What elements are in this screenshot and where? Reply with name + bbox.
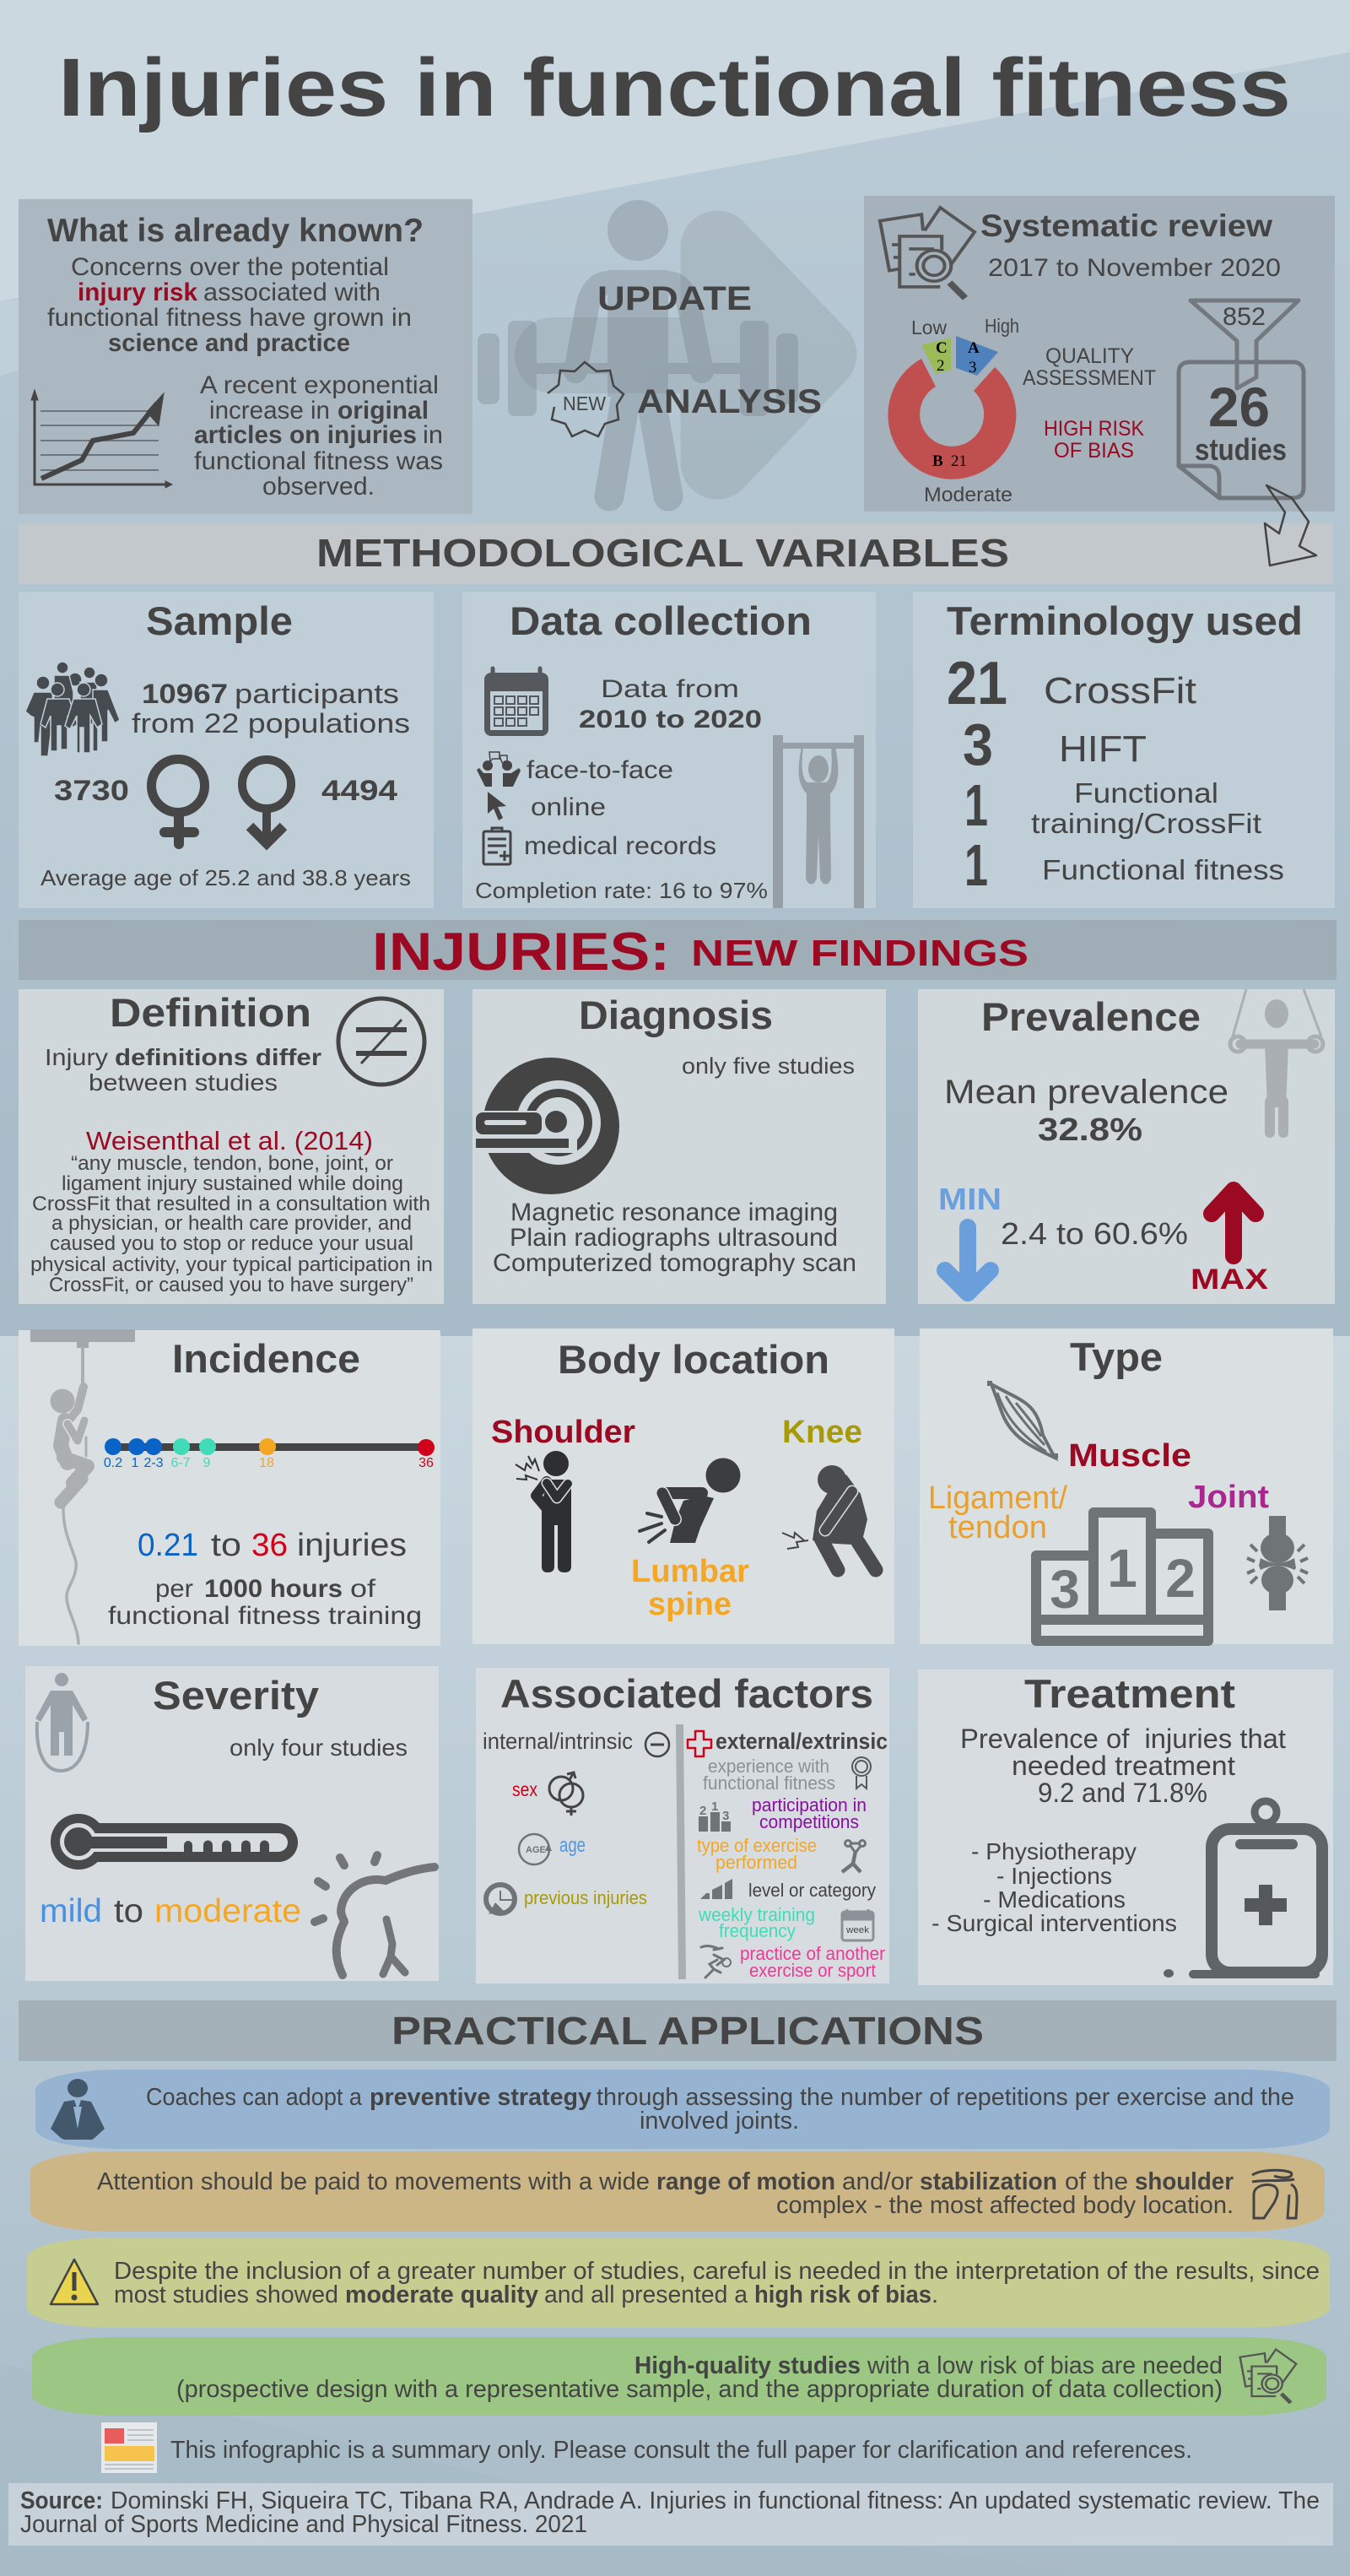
- donut chart: quality assessment: B: [932, 452, 943, 470]
- count: hift: HIFT: [1059, 728, 1147, 770]
- text: range of motion: and/or: [842, 2168, 913, 2195]
- severity range: [40, 1893, 301, 1929]
- factor: type of exercise: [697, 1835, 866, 1873]
- unit statement: 1000 hours: [204, 1575, 343, 1603]
- panel: data collection: [462, 592, 876, 908]
- icon: podium: [1036, 1513, 1208, 1641]
- icon: calendar: [484, 668, 548, 736]
- factor: another sport: [701, 1943, 885, 1981]
- icon: medical record: [483, 828, 510, 864]
- external heading: external/extrinsic: [716, 1729, 888, 1754]
- text: caution: moderate quality: [345, 2281, 538, 2308]
- heading: type: Type: [1070, 1334, 1163, 1379]
- quality assessment label: [1023, 344, 1156, 390]
- text: range of motion: range of motion: [656, 2168, 835, 2195]
- min label: MIN: [938, 1182, 1002, 1216]
- count: functional training: 1: [964, 772, 988, 838]
- chart: incidence timeline: 2-3: [143, 1456, 164, 1470]
- factor: level or category: level or category: [748, 1880, 876, 1901]
- count: crossfit: CrossFit: [1044, 670, 1196, 712]
- count: functional fitness: 1: [964, 832, 988, 898]
- text block: exponential increase: articles on injuries: [194, 421, 417, 449]
- label: online: online: [531, 793, 606, 821]
- title: Injuries in functional fitness: [58, 41, 1291, 133]
- icon: pull up bar and person: [773, 735, 864, 908]
- participants: [132, 679, 410, 739]
- chart: incidence timeline: 36: [418, 1456, 434, 1470]
- factor: weekly training frequency: [698, 1904, 873, 1941]
- modalities: Magnetic resonance imaging: [510, 1199, 838, 1226]
- factor: another sport: practice of another: [740, 1943, 885, 1964]
- panel: terminology used: [913, 592, 1335, 908]
- icon: minus: [645, 1733, 669, 1756]
- heading: incidence: Incidence: [172, 1336, 360, 1381]
- text: preventive strategy: through assessing the number of repetitions per exercise and the: [597, 2084, 1294, 2111]
- section band: injuries new findings: NEW FINDINGS: [691, 933, 1029, 974]
- unit statement: per: [155, 1575, 193, 1603]
- heading: diagnosis: Diagnosis: [579, 993, 773, 1037]
- factor: competitions: 3: [722, 1809, 729, 1823]
- factor: type of exercise: performed: [716, 1852, 797, 1873]
- text: caution: high risk of bias: [754, 2281, 932, 2308]
- text: high quality studies: with a low risk of bias are needed: [867, 2352, 1223, 2379]
- funnel and studies document: [1179, 300, 1304, 498]
- quote: a physician, or health care provider, and: [51, 1212, 412, 1235]
- chart: incidence timeline: 6-7: [170, 1456, 191, 1470]
- text: high quality studies: High-quality studies: [634, 2352, 861, 2379]
- panel: diagnosis: [472, 989, 886, 1304]
- source panel: Journal of Sports Medicine and Physical Fitness. 2021: [20, 2511, 587, 2538]
- text: range of motion: of the: [1065, 2168, 1128, 2195]
- average age: Average age of 25.2 and 38.8 years: [40, 865, 411, 890]
- participants: from 22 populations: [132, 708, 410, 739]
- panel: body location: [472, 1329, 894, 1644]
- text: range of motion: [97, 2168, 1234, 2219]
- funnel and studies document: 852: [1223, 303, 1266, 331]
- label: lumbar spine: Lumbar: [631, 1554, 749, 1589]
- text block: exponential increase: original: [338, 397, 429, 425]
- note: only four studies: [230, 1734, 408, 1761]
- source panel: Source:: [20, 2487, 103, 2514]
- text block: exponential increase: increase in: [209, 397, 330, 425]
- panel: type: [920, 1329, 1333, 1644]
- source panel: [8, 2483, 1333, 2546]
- quote: caused you to stop or reduce your usual: [50, 1232, 413, 1255]
- heading: associated factors: Associated factors: [500, 1671, 873, 1716]
- text: high quality studies: [176, 2352, 1223, 2403]
- text block: exponential increase: [194, 371, 443, 501]
- text: high quality studies: (prospective design with a representative sample, and the appropriate duration of data collection): [176, 2376, 1223, 2403]
- unit statement: [108, 1575, 422, 1630]
- modalities: Plain radiographs ultrasound: [510, 1224, 838, 1252]
- icon: new badge: NEW: [563, 392, 606, 414]
- treatment list: - Physiotherapy: [971, 1838, 1137, 1864]
- modalities: [493, 1199, 856, 1277]
- text block: concerns: science and practice: [108, 329, 350, 357]
- icon: new badge: [548, 362, 624, 436]
- max label: MAX: [1191, 1264, 1268, 1296]
- text: preventive strategy: Coaches can adopt a: [146, 2084, 363, 2111]
- factor: previous injuries: [486, 1885, 647, 1914]
- data range: 2010 to 2020: [579, 706, 762, 733]
- quote: physical activity, your typical participation in: [30, 1253, 433, 1276]
- icon: MRI scanner: [476, 1058, 619, 1194]
- note: only five studies: [682, 1053, 855, 1079]
- application: preventive strategy: [35, 2070, 1330, 2149]
- text block: concerns: injury risk: [78, 279, 197, 306]
- text: range of motion: Attention should be paid to movements with a wide: [97, 2168, 650, 2195]
- factor: competitions: 2: [699, 1804, 706, 1818]
- text: preventive strategy: preventive strategy: [370, 2084, 591, 2111]
- mean prevalence: 32.8%: [1038, 1112, 1142, 1148]
- label: face to face: face-to-face: [526, 756, 673, 784]
- icon: thermometer: [51, 1814, 298, 1870]
- female count: 3730: [54, 775, 129, 807]
- chart: incidence timeline: 0.2: [104, 1456, 122, 1470]
- quality assessment label: ASSESSMENT: [1023, 366, 1156, 390]
- factor: competitions: participation in: [752, 1794, 867, 1816]
- factor: sex: sex: [512, 1778, 537, 1800]
- label: lumbar spine: spine: [648, 1587, 732, 1622]
- icon: shoulder pain person: [516, 1451, 571, 1572]
- text: preventive strategy: involved joints.: [640, 2108, 799, 2135]
- source panel: Dominski FH, Siqueira TC, Tibana RA, Andrade A. Injuries in functional fitness: An updated systematic review. The: [111, 2487, 1320, 2514]
- factor: weekly training frequency: weekly training: [698, 1904, 815, 1925]
- donut chart: quality assessment: Moderate: [924, 484, 1012, 506]
- text: range of motion: complex - the most affected body location.: [776, 2192, 1234, 2219]
- icon: face to face: [477, 752, 521, 787]
- quality assessment label: QUALITY: [1045, 344, 1134, 368]
- funnel and studies document: studies: [1195, 432, 1287, 467]
- text: range of motion: stabilization: [920, 2168, 1057, 2195]
- icon: coach: [51, 2079, 105, 2140]
- factor: weekly training frequency: week: [845, 1925, 870, 1935]
- illustration: update analysis arrow with lifter: [478, 200, 822, 496]
- high risk of bias label: HIGH RISK: [1044, 417, 1144, 441]
- icon: ring gymnast: [1230, 989, 1323, 1133]
- count: functional training: [964, 772, 1261, 839]
- range statement: 36: [251, 1528, 288, 1563]
- arrow: hand drawn curved arrow: [1265, 485, 1316, 566]
- icon: medical clipboard: [1164, 1801, 1322, 1978]
- application: moderate quality caution: [27, 2238, 1330, 2328]
- panel: what is already known: [19, 199, 472, 514]
- factor: competitions: competitions: [759, 1811, 859, 1832]
- donut chart: quality assessment: A: [968, 339, 980, 357]
- quote: “any muscle, tendon, bone, joint, or: [71, 1152, 393, 1175]
- male count: 4494: [321, 775, 397, 807]
- text: range of motion: shoulder: [1135, 2168, 1234, 2195]
- section band: practical applications: PRACTICAL APPLICATIONS: [392, 2009, 984, 2053]
- section band: methodological variables: METHODOLOGICAL VARIABLES: [316, 531, 1009, 575]
- factor: experience: [703, 1756, 871, 1794]
- label: joint: Joint: [1188, 1480, 1269, 1515]
- factor: age: AGE: [526, 1845, 546, 1855]
- text block: concerns: functional fitness have grown in: [47, 304, 412, 332]
- count: functional fitness: Functional fitness: [1042, 854, 1284, 885]
- label: knee: Knee: [782, 1415, 862, 1450]
- text: caution: .: [932, 2281, 938, 2308]
- range statement: 0.21: [138, 1528, 198, 1563]
- text block: concerns: [47, 253, 412, 357]
- modalities: Computerized tomography scan: [493, 1249, 856, 1277]
- range statement: injuries: [297, 1528, 407, 1563]
- icon: podium: 3: [1050, 1559, 1080, 1620]
- text block: exponential increase: observed.: [262, 473, 375, 501]
- section band: injuries new findings: [19, 920, 1336, 982]
- internal heading: internal/intrinsic: [483, 1729, 633, 1754]
- panel: sample: [19, 592, 434, 908]
- data range: [579, 675, 762, 733]
- quote: [30, 1152, 433, 1296]
- factor: level or category: [700, 1879, 876, 1901]
- treatment list: - Surgical interventions: [932, 1910, 1177, 1936]
- donut chart: quality assessment: 3: [969, 359, 977, 376]
- panel: associated factors: [476, 1668, 889, 1983]
- label: ligament tendon: tendon: [948, 1510, 1047, 1545]
- heading: what is already known: What is already known?: [47, 213, 424, 249]
- quote: CrossFit, or caused you to have surgery”: [49, 1274, 413, 1296]
- treatment list: - Injections: [996, 1863, 1112, 1889]
- participants: 10967: [142, 679, 228, 709]
- high risk of bias label: [1044, 417, 1144, 463]
- icon: arrow: [515, 247, 820, 463]
- text: caution: most studies showed: [114, 2281, 338, 2308]
- participants: participants: [235, 679, 399, 709]
- text: caution: Despite the inclusion of a greater number of studies, careful is needed in the interpretation of the results, since: [114, 2258, 1320, 2285]
- severity range: mild: [40, 1893, 102, 1929]
- panel: treatment: [918, 1670, 1333, 1985]
- section band: practical applications: [19, 2000, 1336, 2061]
- donut chart: quality assessment: C: [936, 339, 948, 357]
- factor: age: age: [559, 1834, 586, 1857]
- treatment list: [932, 1838, 1177, 1936]
- icon: cursor: [488, 792, 506, 820]
- heading: prevalence: Prevalence: [981, 994, 1201, 1039]
- factor: competitions: 1: [711, 1799, 718, 1814]
- icon: paper summary: [101, 2422, 157, 2473]
- divider column: [676, 1724, 686, 1979]
- icon: muscle: [987, 1381, 1058, 1458]
- heading: update: UPDATE: [597, 280, 752, 317]
- application: shoulder attention: [30, 2151, 1325, 2232]
- icon: warning triangle: [51, 2259, 98, 2304]
- disclaimer: This infographic is a summary only. Please consult the full paper for clarification and references.: [170, 2437, 1192, 2464]
- icon: rope climber: [30, 1329, 135, 1643]
- icon: injured back: [315, 1855, 435, 1975]
- chart: incidence timeline: [104, 1438, 435, 1470]
- icon: jump rope person: [35, 1673, 88, 1771]
- count: functional training: training/CrossFit: [1031, 808, 1261, 839]
- factor: another sport: exercise or sport: [749, 1960, 876, 1981]
- completion rate: Completion rate: 16 to 97%: [475, 878, 768, 903]
- text block: concerns: associated with: [203, 279, 381, 306]
- arrow: min: [945, 1227, 991, 1293]
- count: crossfit: 21: [947, 650, 1007, 717]
- count: hift: 3: [963, 712, 993, 777]
- factor: previous injuries: previous injuries: [524, 1887, 647, 1908]
- heading: data collection: Data collection: [510, 598, 812, 643]
- donut chart: quality assessment: 21: [951, 452, 967, 470]
- severity range: moderate: [154, 1893, 301, 1929]
- icon: documents with magnifier: [880, 208, 975, 298]
- funnel and studies document: 26: [1208, 376, 1270, 438]
- definitions differ: Injury: [45, 1044, 108, 1070]
- treatment list: - Medications: [983, 1886, 1126, 1913]
- label: shoulder: Shoulder: [491, 1415, 635, 1450]
- label: lumbar spine: [631, 1554, 749, 1622]
- heading: severity: Severity: [153, 1673, 319, 1718]
- icon: podium: 2: [1165, 1548, 1196, 1609]
- donut chart: quality assessment: High: [985, 315, 1019, 337]
- date range: 2017 to November 2020: [988, 254, 1281, 282]
- heading: treatment: Treatment: [1024, 1671, 1235, 1716]
- factor: age: [519, 1834, 586, 1864]
- unit statement: of: [350, 1575, 376, 1603]
- icon: growth line chart: [31, 390, 172, 488]
- icon: not equal: [338, 998, 424, 1085]
- application: high quality studies: [32, 2337, 1326, 2416]
- factor: weekly training frequency: frequency: [719, 1920, 796, 1941]
- panel: definition: [19, 989, 444, 1304]
- high risk of bias label: OF BIAS: [1054, 439, 1134, 463]
- factor: type of exercise: type of exercise: [697, 1835, 817, 1856]
- factor: experience: functional fitness: [703, 1772, 835, 1794]
- count: hift: [963, 712, 1147, 777]
- section band: methodological variables: [19, 523, 1333, 584]
- heading: body location: Body location: [558, 1337, 829, 1382]
- range: 2.4 to 60.6%: [1001, 1216, 1188, 1251]
- heading: sample: Sample: [146, 598, 293, 643]
- heading: terminology used: Terminology used: [947, 598, 1303, 643]
- count: crossfit: [947, 650, 1196, 717]
- donut chart: quality assessment: 2: [937, 357, 945, 375]
- label: muscle: Muscle: [1068, 1438, 1191, 1474]
- text block: exponential increase: functional fitness was: [194, 447, 443, 475]
- text block: exponential increase: A recent exponential: [200, 371, 439, 399]
- panel: incidence: [19, 1329, 440, 1646]
- count: functional fitness: [964, 832, 1284, 898]
- quote: ligament injury sustained while doing: [62, 1172, 403, 1195]
- factor: sex: [512, 1772, 583, 1816]
- panel: systematic review: [864, 196, 1335, 511]
- heading: definition: Definition: [110, 990, 311, 1035]
- icon: plus: [688, 1731, 711, 1756]
- icon: crowd: [25, 662, 120, 756]
- label: ligament tendon: [928, 1480, 1067, 1545]
- range statement: to: [211, 1528, 241, 1563]
- label: ligament tendon: Ligament/: [928, 1480, 1067, 1516]
- label: medical records: medical records: [524, 832, 716, 860]
- factor: competitions: [699, 1794, 867, 1832]
- definitions differ: [45, 1044, 321, 1096]
- mean prevalence: [944, 1074, 1228, 1148]
- chart: incidence timeline: 1: [132, 1456, 139, 1470]
- severity range: to: [114, 1893, 143, 1929]
- factor: experience: experience with: [708, 1756, 829, 1777]
- count: functional training: Functional: [1074, 777, 1218, 809]
- arrow: max: [1212, 1190, 1256, 1256]
- heading: analysis: ANALYSIS: [637, 383, 822, 420]
- section band: injuries new findings: INJURIES:: [372, 923, 670, 982]
- range statement: [138, 1528, 407, 1563]
- panel: prevalence: [918, 989, 1335, 1304]
- donut chart: quality assessment: Low: [911, 317, 947, 338]
- treatment prevalence: needed treatment: [1012, 1751, 1235, 1781]
- heading: systematic review: Systematic review: [980, 208, 1272, 243]
- icon: documents with magnifier small: [1240, 2349, 1296, 2403]
- donut chart: quality assessment: [888, 315, 1019, 506]
- treatment prevalence: Prevalence of injuries that: [960, 1724, 1286, 1754]
- chart: incidence timeline: 18: [259, 1456, 274, 1470]
- chart: incidence timeline: 9: [203, 1456, 211, 1470]
- icon: male symbol: [242, 760, 291, 843]
- icon: joint: [1247, 1516, 1308, 1610]
- text block: concerns: Concerns over the potential: [71, 253, 389, 281]
- text block: exponential increase: in: [423, 421, 443, 449]
- quote: CrossFit that resulted in a consultation with: [32, 1193, 430, 1215]
- data range: Data from: [601, 675, 739, 703]
- definitions differ: definitions differ: [115, 1044, 321, 1070]
- icon: shoulder joint: [1252, 2170, 1297, 2218]
- panel: severity: [25, 1666, 439, 1981]
- text: caution: and all presented a: [544, 2281, 748, 2308]
- citation: Weisenthal et al. (2014): [86, 1126, 373, 1155]
- text: preventive strategy: [146, 2084, 1294, 2135]
- icon: podium: 1: [1107, 1538, 1137, 1599]
- text: caution: [114, 2258, 1320, 2308]
- icon: lumbar pain person: [640, 1458, 741, 1543]
- icon: knee pain person: [782, 1465, 876, 1570]
- treatment prevalence: 9.2 and 71.8%: [1038, 1778, 1207, 1808]
- icon: female symbol: [152, 760, 204, 844]
- icon: weightlifter: [478, 200, 798, 496]
- unit statement: functional fitness training: [108, 1602, 422, 1630]
- mean prevalence: Mean prevalence: [944, 1074, 1228, 1111]
- treatment prevalence: [960, 1724, 1286, 1808]
- definitions differ: between studies: [89, 1069, 278, 1096]
